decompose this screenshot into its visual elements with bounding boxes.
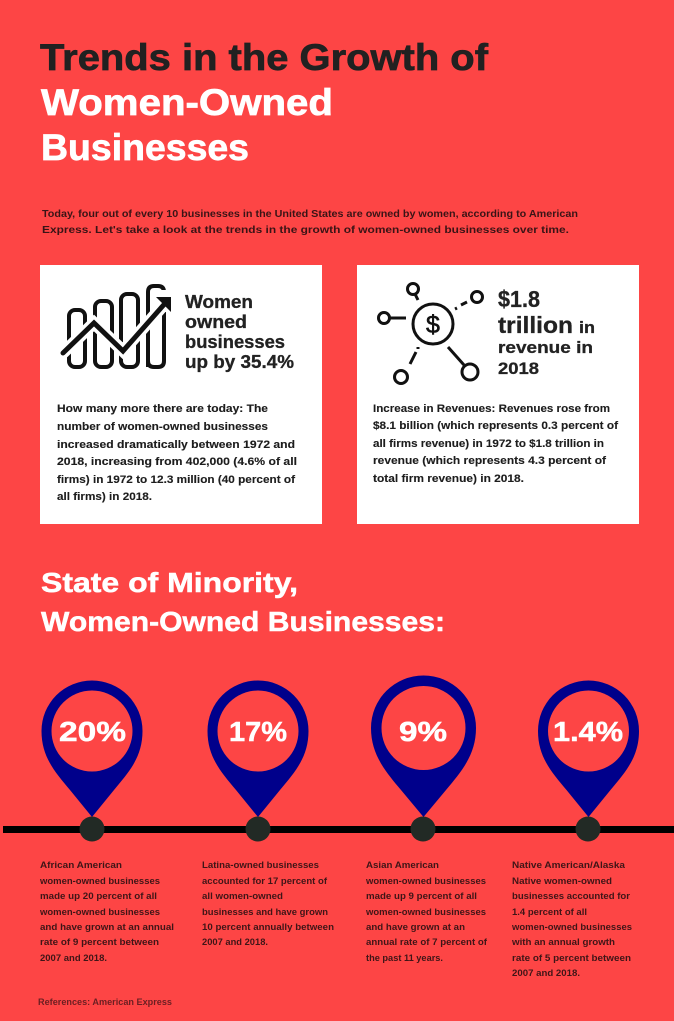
body text: $8.1 billion (which represents 0.3 percent of xyxy=(373,420,618,432)
caption: African American xyxy=(39,860,174,963)
stat: businesses up by 35.4%: Women xyxy=(185,292,253,312)
caption: Native American/Alaska: Native American/Alaska xyxy=(512,860,626,870)
title: Trends in the Growth of xyxy=(40,37,489,78)
stat: $1.8 trillion in revenue: in xyxy=(579,318,595,337)
caption: Latina: Latina-owned businesses xyxy=(202,860,319,870)
caption: Latina xyxy=(202,860,334,947)
stat: businesses up by 35.4%: businesses xyxy=(185,332,285,352)
intro text: Express. Let's take a look at the trends in the growth of women-owned businesses over time. xyxy=(42,225,569,236)
pin: 9% xyxy=(371,675,476,842)
body text: number of women-owned businesses xyxy=(57,421,268,433)
pin: 20%: 20% xyxy=(59,716,126,747)
icon: dollar network xyxy=(378,284,482,384)
caption: Latina: accounted for 17 percent of xyxy=(202,876,328,886)
stat: $1.8 trillion in revenue: 2018 xyxy=(498,359,539,378)
caption: Asian American: and have grown at an xyxy=(366,922,465,932)
caption: Asian American: the past 11 years. xyxy=(366,953,443,963)
icon: dollar network: $ xyxy=(426,311,440,339)
caption: Asian American xyxy=(365,860,488,963)
intro text xyxy=(42,209,578,236)
body text: total firm revenue) in 2018. xyxy=(373,473,524,485)
body text: 2018, increasing from 402,000 (4.6% of all xyxy=(57,456,297,468)
caption: Native American/Alaska: Native women-owned xyxy=(512,876,612,886)
body text: Increase in Revenues: Revenues rose from xyxy=(373,403,610,415)
body text: revenue (which represents 4.3 percent of xyxy=(373,455,606,467)
caption: African American: women-owned businesses xyxy=(39,907,160,917)
section heading: Women-Owned Businesses: xyxy=(41,606,445,637)
section heading: State of Minority, xyxy=(41,567,298,598)
title: Women-Owned xyxy=(41,82,333,123)
title: Businesses xyxy=(41,127,249,168)
pin: 20% xyxy=(42,680,142,842)
body text xyxy=(57,403,297,503)
caption: African American: 2007 and 2018. xyxy=(40,953,107,963)
caption: Latina: 10 percent annually between xyxy=(202,922,334,932)
stat: $1.8 trillion in revenue: $1.8 xyxy=(498,286,540,312)
body text: all firms revenue) in 1972 to $1.8 trillion in xyxy=(373,438,604,450)
section heading xyxy=(41,567,445,637)
panel: revenue xyxy=(357,265,639,524)
caption: Asian American: Asian American xyxy=(366,860,439,870)
panel: women owned businesses xyxy=(40,265,322,524)
caption: African American: made up 20 percent of all xyxy=(40,891,157,901)
stat: $1.8 trillion in revenue: trillion xyxy=(498,312,573,338)
pin: 9%: 9% xyxy=(399,716,447,747)
caption: Native American/Alaska xyxy=(511,860,632,978)
caption: Native American/Alaska: businesses accounted for xyxy=(512,891,631,901)
caption: Latina: 2007 and 2018. xyxy=(202,937,268,947)
title xyxy=(40,37,489,168)
intro text: Today, four out of every 10 businesses in the United States are owned by women, according to American xyxy=(42,209,578,220)
pin: 17% xyxy=(207,680,308,842)
caption: Native American/Alaska: 2007 and 2018. xyxy=(512,968,580,978)
references: References: American Express xyxy=(38,997,172,1007)
caption: African American: and have grown at an annual xyxy=(40,922,174,932)
caption: Native American/Alaska: 1.4 percent of all xyxy=(512,907,587,917)
timeline line xyxy=(3,826,674,833)
stat: businesses up by 35.4% xyxy=(185,292,294,372)
body text: How many more there are today: The xyxy=(57,403,268,415)
pin: 1.4%: 1.4% xyxy=(553,716,623,747)
caption: African American: African American xyxy=(40,860,122,870)
stat: $1.8 trillion in revenue xyxy=(498,286,595,378)
caption: Asian American: annual rate of 7 percent of xyxy=(366,937,488,947)
caption: Asian American: women-owned businesses xyxy=(365,907,486,917)
caption: Asian American: made up 9 percent of all xyxy=(366,891,477,901)
body text: all firms) in 2018. xyxy=(57,491,152,503)
icon: rising bar chart with arrow xyxy=(63,286,175,367)
body text: increased dramatically between 1972 and xyxy=(57,439,295,451)
caption: Native American/Alaska: women-owned businesses xyxy=(511,922,632,932)
caption: Native American/Alaska: with an annual growth xyxy=(511,937,615,947)
caption: African American: women-owned businesses xyxy=(39,876,160,886)
caption: Native American/Alaska: rate of 5 percent between xyxy=(512,953,631,963)
body text: firms) in 1972 to 12.3 million (40 percent of xyxy=(57,474,295,486)
caption: Asian American: women-owned businesses xyxy=(365,876,486,886)
caption: Latina: all women-owned xyxy=(202,891,283,901)
stat: businesses up by 35.4%: up by 35.4% xyxy=(185,352,294,372)
stat: $1.8 trillion in revenue: revenue in xyxy=(498,338,593,357)
pin: 1.4% xyxy=(538,680,639,842)
caption: African American: rate of 9 percent between xyxy=(40,937,159,947)
stat: businesses up by 35.4%: owned xyxy=(185,312,247,332)
pin: 17%: 17% xyxy=(229,716,287,747)
caption: Latina: businesses and have grown xyxy=(202,907,328,917)
body text xyxy=(373,403,618,485)
